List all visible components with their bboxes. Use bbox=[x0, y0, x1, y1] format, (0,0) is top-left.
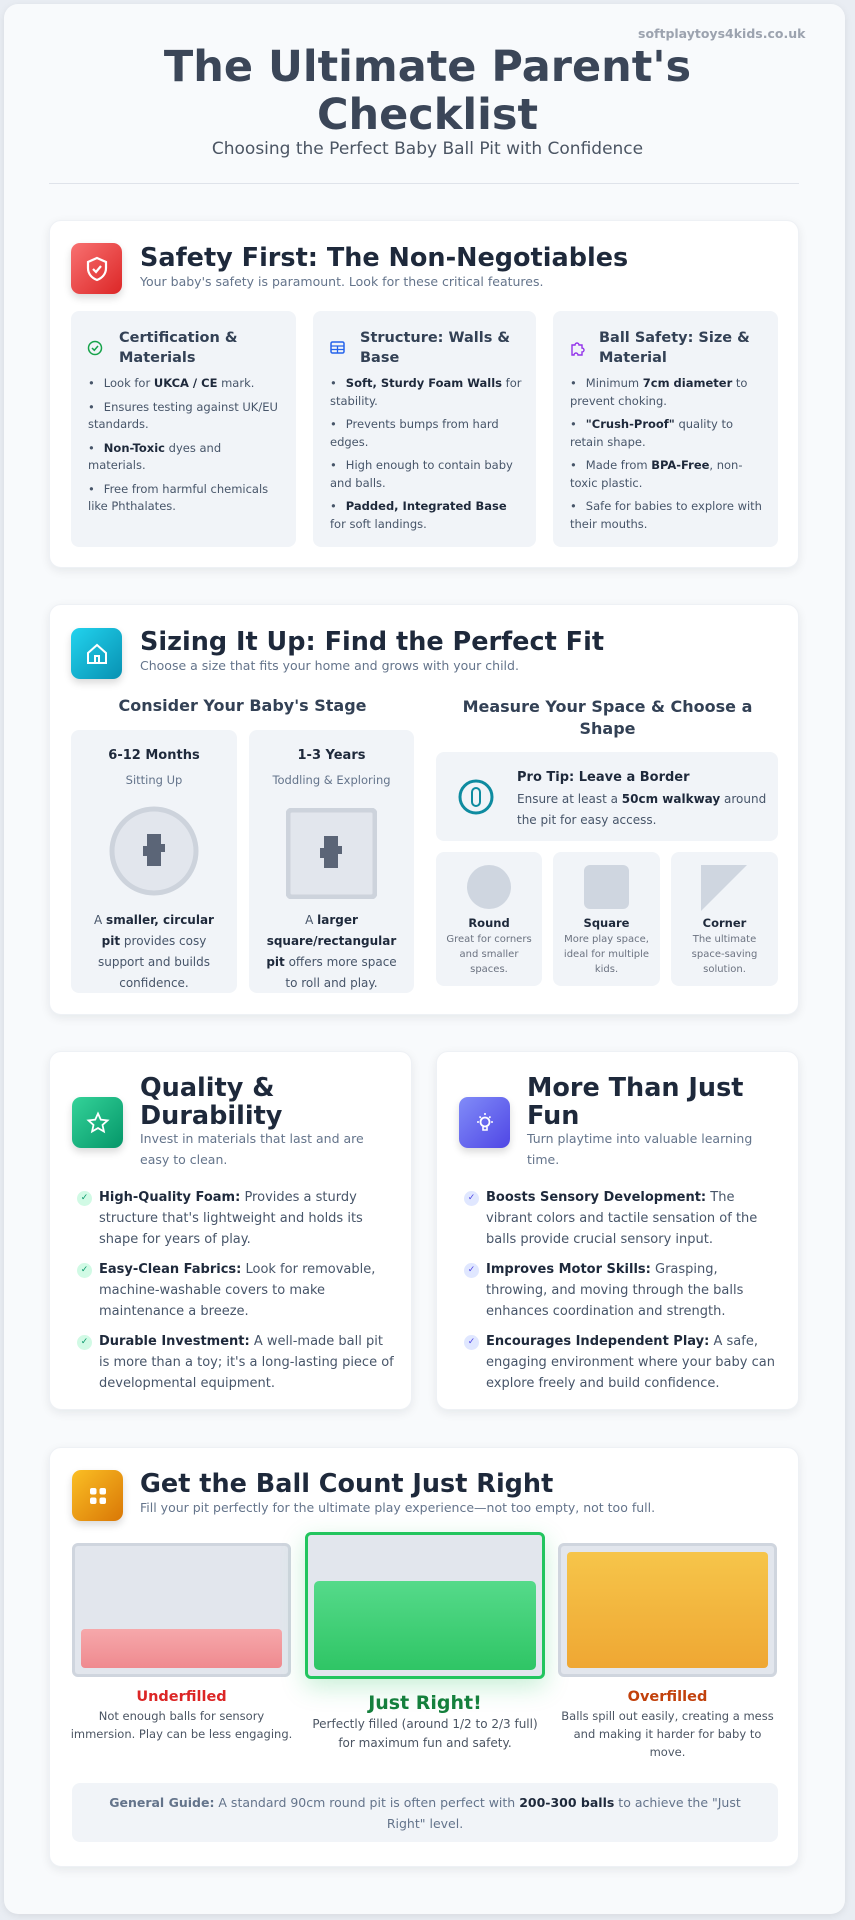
panel: ball count bbox=[49, 1447, 799, 1867]
site url: softplaytoys4kids.co.uk bbox=[638, 26, 805, 41]
label: underfilled bbox=[71, 1689, 292, 1741]
box: certification: Look for UKCA / CE mark. bbox=[104, 376, 254, 390]
label: underfilled: Underfilled bbox=[136, 1689, 227, 1705]
box: round: Great for corners and smaller spaces. bbox=[446, 934, 532, 975]
label: just right: Perfectly filled (around 1/2 to 2/3 full) for maximum fun and safety. bbox=[312, 1717, 538, 1750]
subtitle: Choosing the Perfect Baby Ball Pit with Confidence bbox=[212, 139, 643, 159]
label: just right: Just Right! bbox=[368, 1692, 482, 1714]
chart: overfilled bbox=[558, 1543, 777, 1677]
checklist: Improves Motor Skills: Grasping, throwing, and moving through the balls enhances coordination and strength. bbox=[486, 1262, 743, 1319]
icon: star bbox=[72, 1097, 123, 1148]
label: just right bbox=[312, 1692, 538, 1750]
box: certification: Ensures testing against UK/EU standards. bbox=[88, 400, 278, 431]
subheading: Turn playtime into valuable learning time. bbox=[527, 1131, 752, 1167]
heading: Get the Ball Count Just Right bbox=[140, 1469, 553, 1499]
heading: More Than Just bbox=[527, 1073, 743, 1103]
checklist: Encourages Independent Play: A safe, engaging environment where your baby can explore freely and build confidence. bbox=[486, 1334, 775, 1391]
panel: sizing bbox=[49, 604, 799, 1015]
title: Checklist bbox=[317, 90, 538, 140]
label: overfilled: Overfilled bbox=[628, 1689, 707, 1705]
box: 1-3 years: 1-3 Years bbox=[298, 748, 365, 763]
subheading: Fill your pit perfectly for the ultimate play experience—not too empty, not too full. bbox=[140, 1500, 655, 1515]
box: square: Square bbox=[584, 916, 629, 930]
chart: just right bbox=[305, 1532, 545, 1679]
icon: house bbox=[71, 628, 122, 679]
heading: Fun bbox=[527, 1101, 579, 1131]
box: square: More play space, ideal for multiple kids. bbox=[564, 934, 649, 975]
box: certification: Certification & bbox=[119, 330, 238, 346]
title bbox=[164, 42, 691, 140]
subheading: Invest in materials that last and are easy to clean. bbox=[140, 1131, 364, 1167]
heading: Safety First: The Non-Negotiables bbox=[140, 243, 628, 273]
checklist: High-Quality Foam: Provides a sturdy structure that's lightweight and holds its shape for years of play. bbox=[99, 1190, 363, 1247]
box: ball safety: Made from BPA-Free, non-toxic plastic. bbox=[570, 458, 742, 490]
box: round: Round bbox=[468, 916, 510, 930]
box: certification: Materials bbox=[119, 350, 196, 366]
box: ball safety bbox=[553, 311, 778, 547]
checklist: Durable Investment: A well-made ball pit is more than a toy; it's a long-lasting piece of developmental equipment. bbox=[99, 1334, 394, 1391]
callout: general guide bbox=[72, 1783, 778, 1842]
box: pro tip bbox=[436, 752, 778, 841]
subheading: Your baby's safety is paramount. Look for these critical features. bbox=[140, 274, 543, 289]
box: 6-12 months bbox=[71, 730, 237, 993]
panel: quality: ✓ bbox=[81, 1265, 88, 1275]
icon: puzzle bbox=[571, 342, 585, 356]
checklist: Boosts Sensory Development: The vibrant colors and tactile sensation of the balls provide crucial sensory input. bbox=[486, 1190, 757, 1247]
box: certification: Non-Toxic dyes and materials. bbox=[88, 440, 221, 472]
box: 1-3 years: A larger square/rectangular pit offers more space to roll and play. bbox=[266, 913, 397, 990]
panel: more than fun: ✓ bbox=[468, 1265, 475, 1275]
panel: safety first bbox=[49, 220, 799, 568]
panel: quality: ✓ bbox=[81, 1337, 88, 1347]
box: corner: The ultimate space-saving solution. bbox=[692, 934, 757, 975]
box: structure bbox=[313, 311, 536, 547]
box: certification: Free from harmful chemicals like Phthalates. bbox=[88, 482, 268, 513]
subheading: Choose a size that fits your home and grows with your child. bbox=[140, 658, 519, 673]
heading bbox=[527, 1073, 743, 1131]
box: 6-12 months: 6-12 Months bbox=[108, 748, 200, 763]
title: The Ultimate Parent's bbox=[164, 42, 691, 92]
heading: Quality & bbox=[140, 1073, 274, 1103]
callout: general guide: General Guide: A standard 90cm round pit is often perfect with 200-300 balls to achieve the "Just Right" level. bbox=[109, 1795, 741, 1831]
box: pro tip: Pro Tip: Leave a Border bbox=[517, 770, 690, 785]
box: structure: Padded, Integrated Base for soft landings. bbox=[330, 499, 507, 530]
icon: grid bbox=[330, 341, 345, 354]
box: 6-12 months: A smaller, circular pit provides cosy support and builds confidence. bbox=[94, 913, 214, 990]
box: structure: High enough to contain baby and balls. bbox=[330, 458, 513, 490]
box: ball safety: Safe for babies to explore with their mouths. bbox=[570, 499, 762, 530]
box: structure: Soft, Sturdy Foam Walls for stability. bbox=[330, 376, 522, 408]
box: square bbox=[553, 852, 660, 986]
heading: baby's stage: Consider Your Baby's Stage bbox=[118, 696, 366, 715]
icon: check circle bbox=[88, 340, 102, 356]
checklist bbox=[77, 1190, 394, 1391]
panel: quality bbox=[49, 1051, 412, 1410]
box: corner bbox=[671, 852, 778, 986]
box: pro tip: Ensure at least a 50cm walkway around the pit for easy access. bbox=[517, 792, 766, 827]
icon: shield bbox=[71, 243, 122, 294]
panel: more than fun bbox=[436, 1051, 799, 1410]
box: 1-3 years bbox=[249, 730, 414, 993]
panel: quality: ✓ bbox=[81, 1193, 88, 1203]
checklist bbox=[464, 1190, 775, 1391]
icon: bulb bbox=[459, 1097, 510, 1148]
panel: more than fun: ✓ bbox=[468, 1337, 475, 1347]
label: overfilled: Balls spill out easily, creating a mess and making it harder for baby to move. bbox=[561, 1709, 774, 1759]
panel: more than fun: ✓ bbox=[468, 1193, 475, 1203]
box: corner: Corner bbox=[703, 916, 746, 930]
box: certification bbox=[71, 311, 296, 547]
box: round bbox=[436, 852, 542, 986]
icon: square pit bbox=[286, 808, 377, 899]
heading bbox=[140, 1073, 282, 1131]
chart: underfilled bbox=[72, 1543, 291, 1677]
heading: measure space: Measure Your Space & Choose a Shape bbox=[463, 697, 752, 738]
box: structure: Base bbox=[360, 350, 399, 366]
label: underfilled: Not enough balls for sensory immersion. Play can be less engaging. bbox=[71, 1709, 292, 1741]
heading: Sizing It Up: Find the Perfect Fit bbox=[140, 627, 604, 657]
box: ball safety: Ball Safety: Size & bbox=[599, 330, 750, 346]
box: ball safety: Minimum 7cm diameter to prevent choking. bbox=[570, 376, 747, 408]
box: ball safety: "Crush-Proof" quality to retain shape. bbox=[570, 417, 733, 448]
box: structure: Prevents bumps from hard edges. bbox=[330, 417, 499, 448]
box: 6-12 months: Sitting Up bbox=[126, 773, 182, 787]
box: ball safety: Material bbox=[599, 350, 667, 366]
icon: grid dots bbox=[72, 1470, 123, 1521]
icon: ruler circle bbox=[458, 780, 494, 814]
icon: round pit bbox=[110, 806, 198, 896]
checklist: Easy-Clean Fabrics: Look for removable, machine-washable covers to make maintenance a breeze. bbox=[99, 1262, 375, 1319]
heading: Durability bbox=[140, 1101, 282, 1131]
box: 1-3 years: Toddling & Exploring bbox=[272, 773, 391, 787]
box: structure: Structure: Walls & bbox=[360, 330, 510, 346]
